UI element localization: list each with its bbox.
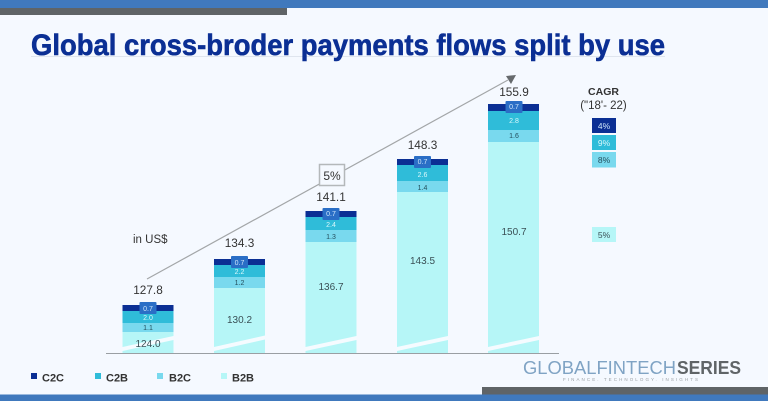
CAGR column: 9% [598,138,611,148]
bar: 2020 total 141.1: 1.3 [326,234,336,241]
CAGR column: 8% [598,155,611,165]
legend [31,372,254,384]
bar: 2020 total 141.1: 0.7 [326,211,336,218]
bottom band [0,387,768,401]
bar: 2018 total 127.8: 0.7 [143,306,153,313]
bar: 2019 total 134.3 [214,236,265,353]
legend: C2C [42,372,64,384]
baseline axis [106,352,559,354]
CAGR column: 4% [598,121,611,131]
legend: B2B [232,372,254,384]
CAGR heading: ("18'- 22) [580,100,627,112]
bar: 2019 total 134.3: 130.2 [227,315,252,326]
bar: 2021 total 148.3: 143.5 [410,256,435,267]
brand logo: GLOBALFINTECH [523,358,676,378]
growth rate box: 5% [323,169,341,183]
bar: 2018 total 127.8 [122,283,174,353]
bar: 2019 total 134.3: 134.3 [225,236,255,250]
bar: 2018 total 127.8: 127.8 [133,283,163,297]
top band [0,0,768,15]
unit label: in US$ [133,234,168,246]
bar: 2019 total 134.3: 2.2 [235,269,244,276]
bar: 2021 total 148.3: 0.7 [418,159,427,166]
CAGR column [592,118,616,242]
bar: 2022 total 155.9: 1.6 [509,133,519,140]
legend: C2B [106,372,128,384]
bar: 2020 total 141.1: 141.1 [316,190,346,204]
CAGR column: 5% [598,230,611,240]
CAGR heading: CAGR [588,86,619,98]
bar: 2022 total 155.9: 2.8 [509,118,519,125]
brand logo [523,358,741,382]
bar: 2021 total 148.3: 2.6 [418,172,427,179]
bar: 2019 total 134.3: 1.2 [235,280,244,287]
brand logo: SERIES [677,358,741,378]
bar: 2019 total 134.3: 0.7 [235,260,244,267]
bar: 2022 total 155.9: 155.9 [499,85,529,99]
brand logo: FINANCE. TECHNOLOGY. INSIGHTS [563,377,698,382]
bar: 2022 total 155.9: 0.7 [509,104,519,111]
title: Global cross-broder payments flows split by use [31,29,665,62]
bar: 2021 total 148.3: 1.4 [418,185,427,192]
bar: 2020 total 141.1 [306,190,356,353]
bar: 2020 total 141.1: 136.7 [318,282,344,293]
bar: 2018 total 127.8: 124.0 [135,339,161,350]
bar: 2022 total 155.9: 150.7 [501,227,527,238]
legend: B2C [169,372,191,384]
CAGR heading [580,86,627,112]
growth rate box [320,164,344,186]
bar: 2022 total 155.9 [488,85,539,353]
bar: 2021 total 148.3 [397,138,448,353]
bar: 2018 total 127.8: 2.0 [143,315,153,322]
bar: 2020 total 141.1: 2.4 [326,222,336,229]
bar: 2021 total 148.3: 148.3 [408,138,438,152]
bar: 2018 total 127.8: 1.1 [143,325,153,332]
growth arrow [147,75,516,279]
